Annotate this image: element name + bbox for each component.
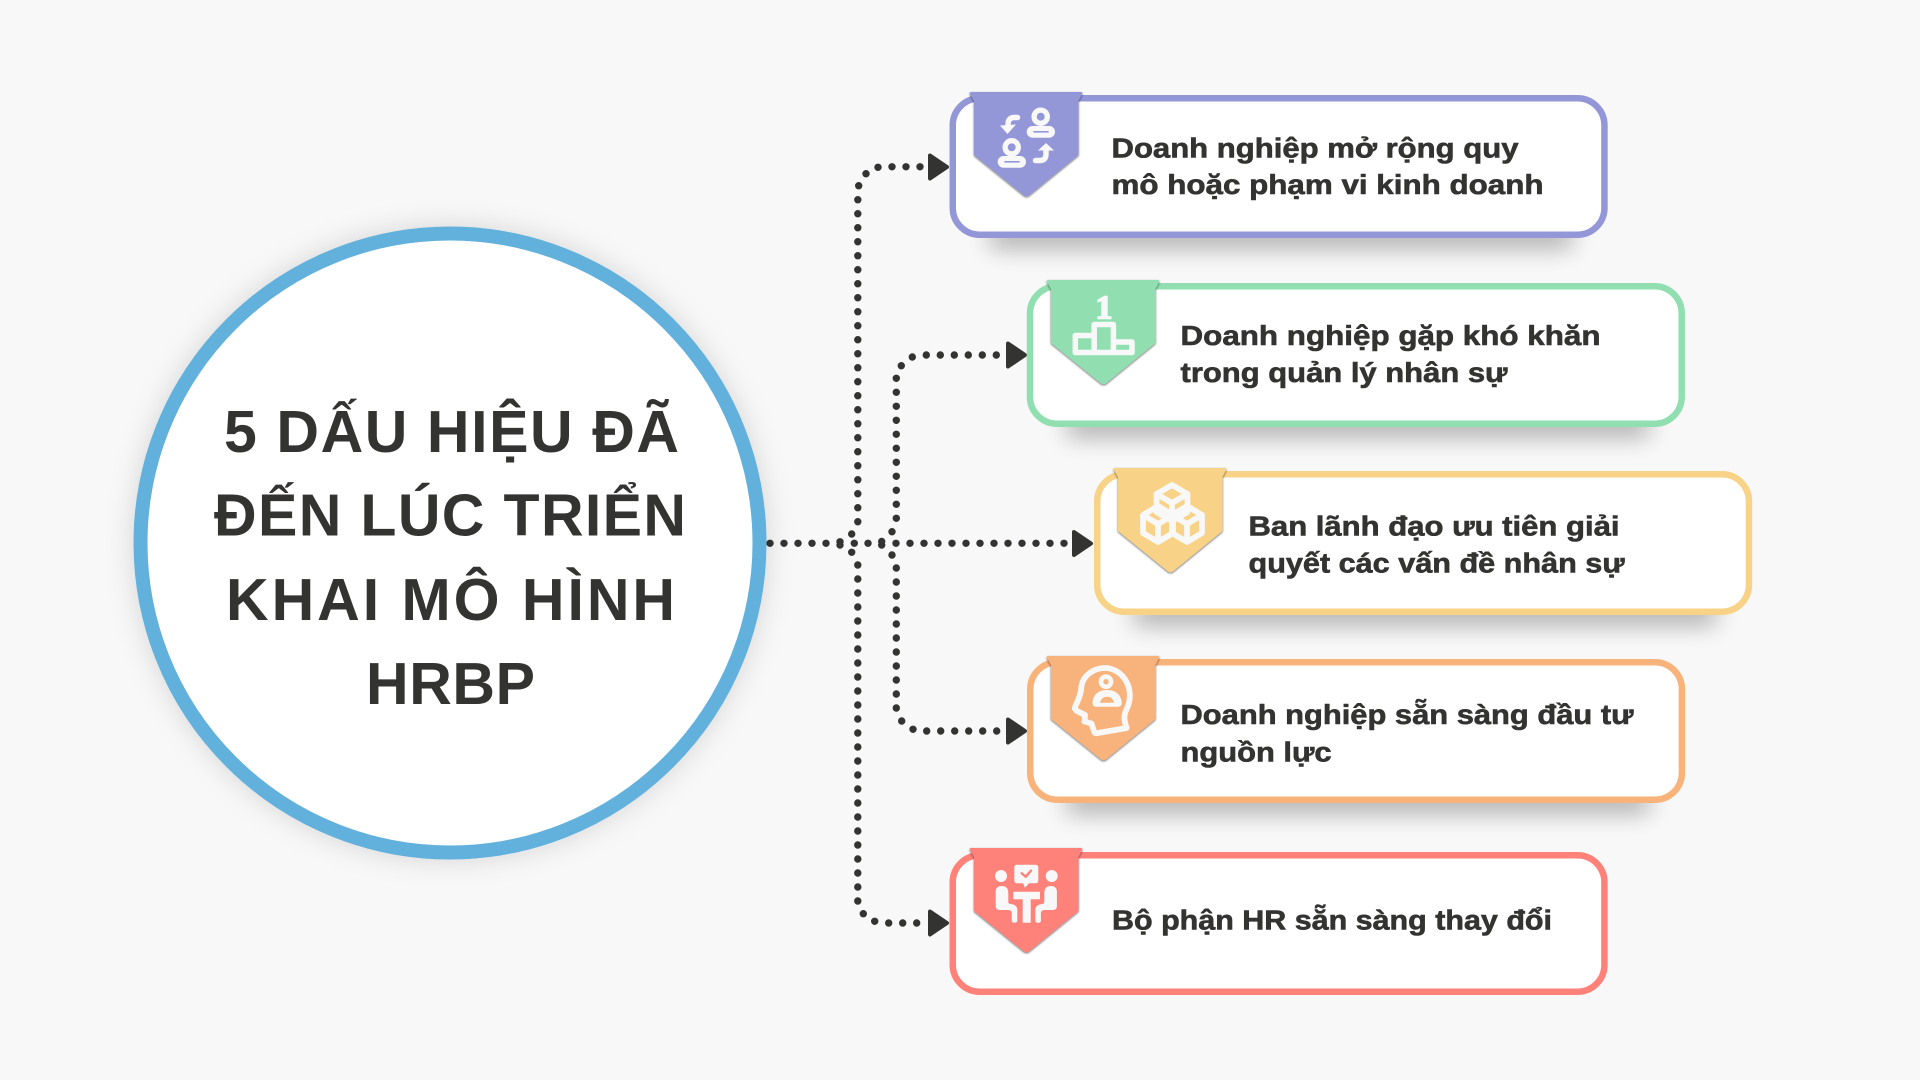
text: Ban lãnh đạo ưu tiên giải: [1248, 511, 1620, 542]
text: quyết các vấn đề nhân sự: [1248, 548, 1625, 579]
arrow to card 5: [930, 912, 947, 934]
panel: card 3: [1097, 468, 1749, 625]
arrow to card 3: [1074, 532, 1091, 555]
icon: cubes badge: [1114, 468, 1226, 572]
title: KHAI MÔ HÌNH: [226, 566, 675, 633]
icon: podium badge: 1: [1096, 289, 1112, 326]
panel: card 4: [1030, 656, 1682, 813]
text: [1112, 132, 1544, 200]
arrow heads: [930, 156, 1091, 934]
title: 5 DẤU HIỆU ĐÃ: [224, 398, 679, 465]
icon: meeting badge: [970, 848, 1082, 952]
title: [214, 398, 686, 717]
connector: trunk to card 3: [770, 542, 1064, 545]
text: Doanh nghiệp gặp khó khăn: [1180, 320, 1600, 351]
text: [1180, 320, 1600, 388]
text: mô hoặc phạm vi kinh doanh: [1112, 169, 1544, 200]
connector: branch to card 2: [892, 355, 996, 532]
panel: central circle: [140, 234, 760, 852]
arrow to card 1: [930, 156, 947, 178]
arrow to card 2: [1008, 344, 1025, 366]
panel: card 1: [953, 92, 1604, 248]
icon: head with person badge: [1047, 656, 1159, 760]
text: nguồn lực: [1180, 736, 1332, 768]
text: [1180, 698, 1634, 768]
text: Doanh nghiệp mở rộng quy: [1112, 132, 1519, 163]
text: Doanh nghiệp sẵn sàng đầu tư: [1180, 698, 1634, 730]
title: ĐẾN LÚC TRIỂN: [214, 483, 686, 549]
title: HRBP: [366, 651, 535, 717]
connector: branch to card 4: [892, 555, 997, 731]
connector: branch to card 5: [852, 552, 917, 923]
arrow to card 4: [1008, 720, 1025, 742]
connector: branch to card 1: [852, 167, 920, 534]
panel: card 2: [1030, 280, 1682, 437]
panel: card 5: [953, 848, 1604, 992]
dotted connectors: [770, 167, 1064, 923]
icon: people exchange badge: [970, 92, 1082, 196]
text: trong quản lý nhân sự: [1180, 357, 1508, 388]
icon: podium badge: [1047, 280, 1159, 384]
text: Bộ phận HR sẵn sàng thay đổi: [1112, 903, 1552, 935]
text: [1248, 511, 1625, 579]
